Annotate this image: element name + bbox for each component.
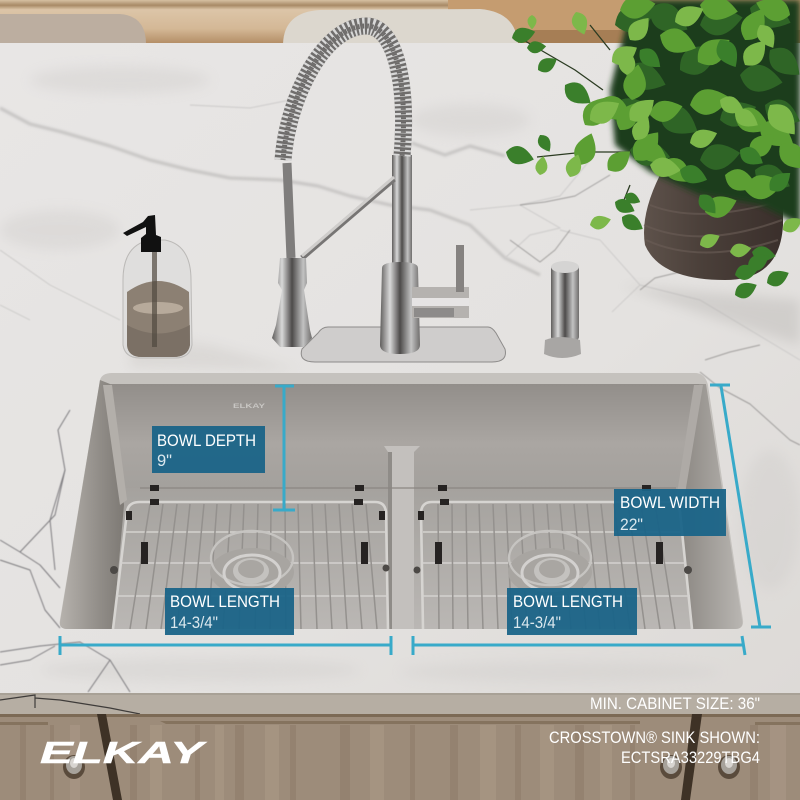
background wood wall [0, 0, 800, 44]
chairs [0, 9, 518, 44]
right bottom grid [421, 502, 692, 629]
divider side shade [388, 452, 392, 629]
label: bowl depth: BOWL DEPTH [157, 432, 256, 450]
faucet base [380, 262, 420, 354]
minimum cabinet size note: MIN. CABINET SIZE: 36" [590, 694, 760, 713]
spring spout [283, 26, 404, 160]
Elkay logo: ELKAY [40, 735, 208, 770]
dimension: bowl width line [710, 385, 771, 627]
kitchen faucet [272, 26, 505, 362]
label: left bowl length: 14-3/4" [170, 614, 218, 632]
soap bottle [123, 215, 192, 358]
center divider [384, 446, 420, 629]
sink model note: ECTSRA33229TBG4 [621, 748, 760, 767]
dimension: right bowl length line [413, 636, 745, 655]
label: bowl width [614, 489, 726, 536]
faucet column [392, 155, 412, 267]
stems [520, 25, 650, 210]
wood cabinets [0, 714, 800, 800]
sink rim [60, 373, 743, 629]
dimension: bowl depth line [273, 386, 295, 510]
right wall corner highlight [676, 385, 703, 500]
support arm [302, 177, 394, 258]
cabinet knobs [63, 755, 740, 779]
marble mottling [0, 66, 800, 682]
plant pot [644, 175, 783, 280]
sink model note: CROSSTOWN® SINK SHOWN: [549, 728, 760, 747]
leaves [504, 0, 800, 302]
rack clips and bumpers [110, 485, 692, 574]
stamped logo: ELKAY [233, 403, 266, 410]
left bottom grid [113, 502, 388, 629]
lever handle [412, 245, 469, 318]
wall and floor seam [140, 487, 676, 489]
label: right bowl length [507, 588, 637, 635]
left wall corner highlight [103, 385, 127, 505]
flexible hose [287, 163, 291, 258]
right drain [508, 531, 592, 596]
label: left bowl length [165, 588, 294, 635]
undermount sink [60, 373, 743, 629]
soap dispenser [544, 261, 581, 358]
spray head [272, 258, 312, 347]
counter front edge [0, 693, 800, 714]
label: bowl depth: 9" [157, 452, 172, 470]
bowl floor [105, 488, 695, 629]
back wall [108, 384, 704, 492]
label: right bowl length: 14-3/4" [513, 614, 561, 632]
soft shadows on the counter [130, 285, 800, 370]
dimension: left bowl length line [60, 636, 391, 655]
sink model note [549, 728, 760, 767]
label: right bowl length: BOWL LENGTH [513, 593, 623, 611]
left wall [60, 380, 124, 629]
marble veins [0, 98, 800, 692]
right wall [680, 384, 742, 629]
label: bowl depth [152, 426, 265, 473]
label: bowl width: BOWL WIDTH [620, 494, 720, 512]
left drain [210, 531, 294, 596]
deck plate [301, 327, 505, 362]
label: left bowl length: BOWL LENGTH [170, 593, 280, 611]
dark foliage mass [610, 0, 800, 225]
potted plant [504, 0, 800, 302]
soap pump [123, 215, 161, 252]
label: bowl width: 22" [620, 516, 643, 534]
